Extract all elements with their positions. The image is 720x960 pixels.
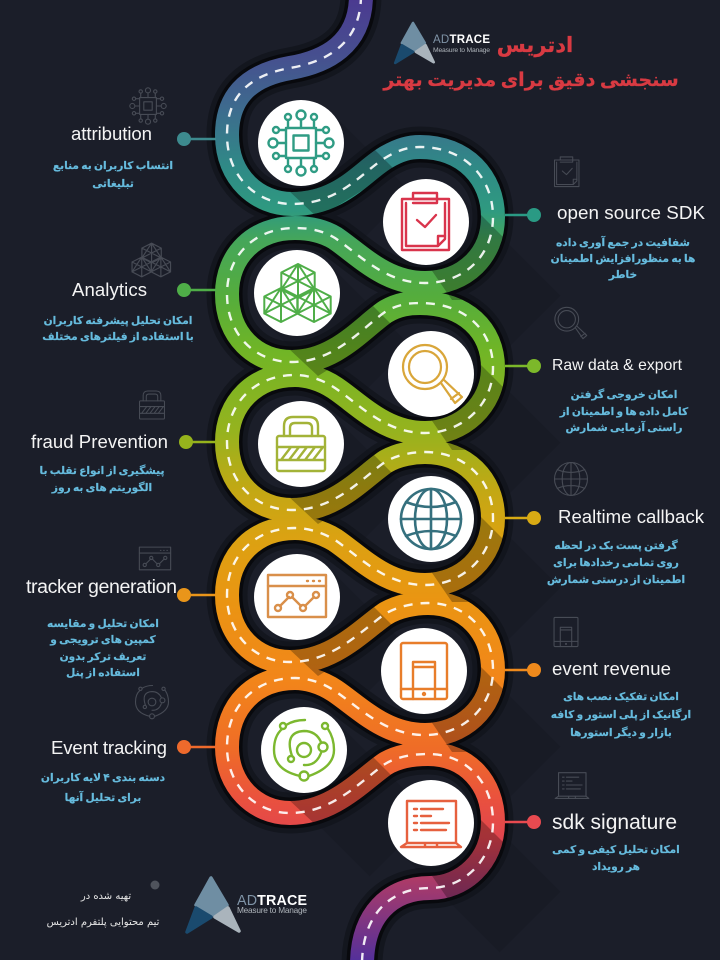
circle: event tracking orbit [261, 707, 347, 793]
panel: raw data and export [505, 307, 689, 434]
dot [527, 208, 541, 222]
panel: event tracking [41, 686, 216, 804]
panel: sdk signature [505, 773, 680, 873]
heading: open source SDK [557, 202, 705, 223]
connector [505, 821, 534, 823]
dot [527, 815, 541, 829]
description: اطمینان از درستی شمارش [547, 574, 685, 586]
dot [527, 359, 541, 373]
description: دسته بندی ۴ لایه کاربران [41, 772, 166, 784]
icon: chart window [139, 547, 171, 570]
description [40, 464, 165, 494]
heading: Raw data & export [552, 357, 683, 374]
heading: attribution [71, 123, 152, 144]
icon: chip [130, 88, 166, 124]
heading: fraud Prevention [31, 431, 168, 452]
connector [184, 138, 216, 140]
circle: realtime callback globe [388, 476, 474, 562]
circle: raw data magnifier [388, 331, 474, 417]
description: پیشگیری از انواع تقلب با [40, 464, 165, 477]
description: خاطر [608, 269, 637, 281]
description: روی تمامی رخدادها برای [553, 557, 679, 569]
dot [177, 132, 191, 146]
icon: magnifier [555, 307, 587, 339]
description: کامل داده ها و اطمینان از [559, 406, 689, 418]
icon: globe [554, 462, 588, 496]
panel: attribution [53, 88, 216, 190]
description: تبلیغاتی [92, 178, 134, 190]
circle: open source SDK clipboard [383, 179, 469, 265]
dot [177, 740, 191, 754]
panel: open source SDK [505, 157, 705, 281]
logo: bottom [187, 878, 307, 932]
icon: laptop [555, 773, 589, 798]
circle: sdk signature laptop [388, 780, 474, 866]
heading: Realtime callback [558, 506, 705, 527]
description: انتساب کاربران به منابع [53, 160, 173, 172]
description: امکان تحلیل پیشرفته کاربران [44, 315, 192, 327]
logo: top [395, 23, 490, 63]
description: با استفاده از فیلترهای مختلف [42, 331, 194, 343]
heading: event revenue [552, 658, 671, 679]
connector [184, 746, 216, 748]
description: ارگانیک از پلی استور و کافه [551, 708, 691, 721]
logo: top: ADTRACE [433, 34, 490, 46]
description: هر رویداد [592, 861, 640, 873]
panel: realtime callback [505, 462, 705, 586]
title line 1: ادتریس [497, 33, 573, 57]
connector [184, 594, 216, 596]
circle: tracker generation chart [254, 554, 340, 640]
description: امکان تفکیک نصب های [563, 691, 679, 703]
description: امکان تحلیل کیفی و کمی [552, 844, 680, 856]
footer [47, 878, 307, 932]
circle: fraud prevention lock [258, 401, 344, 487]
footer bullet [150, 880, 160, 890]
description [551, 691, 691, 739]
circle: attribution chip [258, 100, 344, 186]
heading: sdk signature [552, 811, 677, 834]
description: بازار و دیگر استورها [570, 726, 672, 739]
description [552, 844, 680, 873]
title line 2: سنجشی دقیق برای مدیریت بهتر [382, 69, 679, 91]
heading: Event tracking [51, 737, 167, 758]
panel: tracker generation [26, 547, 216, 679]
dot [527, 663, 541, 677]
footer credit line 2: تیم محتوایی پلتفرم ادتریس [47, 917, 160, 928]
panel: fraud prevention [31, 391, 216, 494]
connector [184, 289, 216, 291]
panel: event revenue [505, 617, 691, 739]
icon: lock [140, 391, 164, 419]
connector [505, 214, 534, 216]
icon: orbit [136, 686, 168, 719]
description [41, 772, 166, 804]
dot [527, 511, 541, 525]
description: راستی آزمایی شمارش [566, 420, 682, 434]
description: استفاده از پنل [66, 667, 140, 679]
description [53, 160, 173, 190]
description: کمپین های ترویجی و [49, 634, 157, 646]
heading: tracker generation [26, 576, 177, 598]
description [47, 618, 159, 679]
description: برای تحلیل آنها [65, 790, 141, 804]
dot [179, 435, 193, 449]
description: ها به منظورافزایش اطمینان [551, 253, 695, 265]
description: شفافیت در جمع آوری داده [556, 235, 690, 249]
long shadows behind the circles [297, 143, 530, 922]
circle: analytics cubes [254, 250, 340, 336]
connector [186, 441, 216, 443]
connector [505, 365, 534, 367]
description: الگوریتم های به روز [51, 481, 152, 494]
description [42, 315, 194, 343]
dot [177, 588, 191, 602]
circle: event revenue tablet [381, 628, 467, 714]
description: امکان تحلیل و مقایسه [47, 618, 159, 630]
logo: bottom: Measure to Manage [237, 905, 307, 915]
description: گرفتن پست بک در لحظه [554, 539, 679, 552]
description [559, 388, 689, 434]
dot [177, 283, 191, 297]
logo: bottom: ADTRACE [237, 893, 307, 909]
description [547, 539, 685, 586]
connector [505, 669, 534, 671]
logo: top: Measure to Manage [433, 47, 490, 54]
icon: tablet [554, 617, 578, 647]
panel: analytics [42, 243, 216, 343]
description: امکان خروجی گرفتن [571, 388, 677, 401]
footer credit line 1: تهیه شده در [80, 891, 131, 902]
description: تعریف ترکر بدون [60, 651, 146, 663]
winding road [227, 0, 493, 960]
icon: cubes [132, 243, 171, 277]
heading: Analytics [72, 279, 147, 300]
description [551, 235, 695, 281]
title block [382, 23, 679, 91]
connector [505, 517, 534, 519]
icon: clipboard [555, 157, 579, 187]
